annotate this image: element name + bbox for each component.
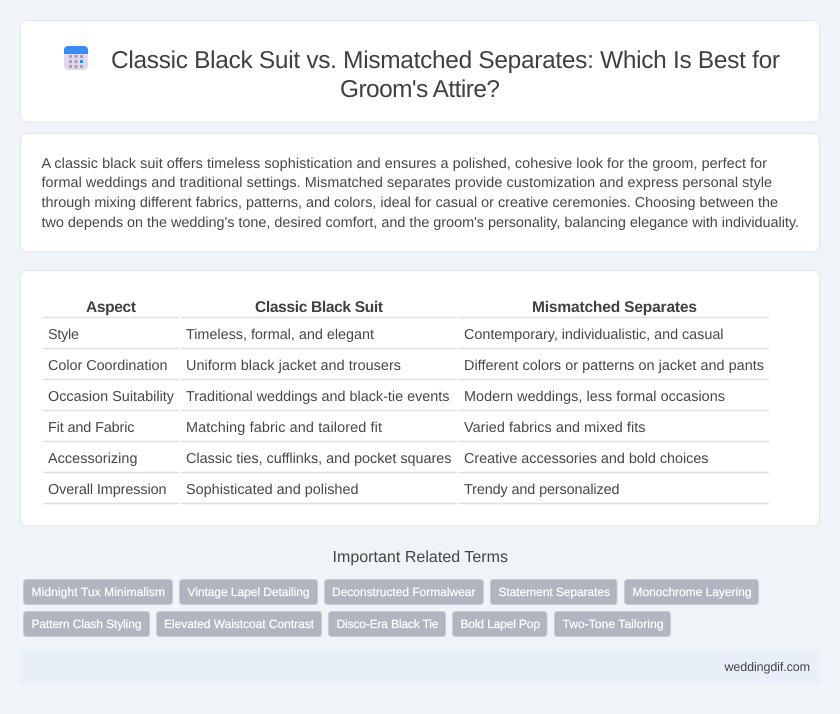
footer bar bbox=[20, 650, 820, 684]
tag: Bold Lapel Pop bbox=[452, 612, 547, 636]
tag: Statement Separates: Statement Separates bbox=[498, 585, 610, 599]
text block: introduction paragraph: A classic black suit offers timeless sophistication and ensures a polished, cohesive look for the groom, perfect for bbox=[42, 156, 767, 172]
tag list: related terms bbox=[24, 580, 758, 636]
tag: Deconstructed Formalwear: Deconstructed Formalwear bbox=[332, 585, 476, 599]
table row: fit and fabric: Matching fabric and tailored fit bbox=[186, 420, 382, 436]
table header row: Classic Black Suit bbox=[255, 299, 383, 316]
icon: calendar bbox=[64, 46, 88, 70]
text block: introduction paragraph: through mixing different fabrics, patterns, and colors, ideal for casual or creative ceremonies. Choosing between the bbox=[42, 195, 778, 211]
table row: color coordination: Different colors or patterns on jacket and pants bbox=[464, 358, 764, 374]
title: Groom's Attire? bbox=[340, 76, 500, 103]
table row: color coordination: Color Coordination bbox=[48, 358, 168, 374]
table row: accessorizing: Accessorizing bbox=[48, 451, 138, 467]
tag: Pattern Clash Styling: Pattern Clash Styling bbox=[32, 617, 142, 631]
table row: overall impression: Sophisticated and polished bbox=[186, 482, 358, 498]
text block: introduction paragraph: two depends on the wedding's tone, desired comfort, and the groom's personality, balancing elegance with individuality. bbox=[42, 215, 799, 231]
text block: introduction paragraph: formal weddings and traditional settings. Mismatched separates provide customization and express personal style bbox=[42, 175, 772, 191]
tag: Two-Tone Tailoring: Two-Tone Tailoring bbox=[562, 617, 664, 631]
table row: occasion suitability: Traditional weddings and black-tie events bbox=[186, 389, 450, 405]
tag: Midnight Tux Minimalism: Midnight Tux Minimalism bbox=[32, 585, 165, 599]
table header row bbox=[86, 299, 697, 316]
footer source text: weddingdif.com bbox=[724, 660, 810, 674]
tag: Disco-Era Black Tie bbox=[328, 612, 446, 636]
table row: overall impression: Trendy and personalized bbox=[464, 482, 620, 498]
table row: accessorizing: Classic ties, cufflinks, and pocket squares bbox=[186, 451, 452, 467]
table row: fit and fabric: Fit and Fabric bbox=[48, 420, 134, 436]
title bbox=[111, 47, 780, 103]
table header row: Mismatched Separates bbox=[532, 299, 697, 316]
tag: Deconstructed Formalwear bbox=[324, 580, 484, 604]
table row: style: Style bbox=[48, 327, 79, 343]
table row: color coordination bbox=[48, 358, 764, 374]
panel: comparison table bbox=[20, 270, 820, 526]
tag: Pattern Clash Styling bbox=[24, 612, 150, 636]
tag: Disco-Era Black Tie: Disco-Era Black Tie bbox=[336, 617, 439, 631]
table row: fit and fabric bbox=[48, 420, 646, 436]
table row: style bbox=[48, 327, 724, 343]
tag: Statement Separates bbox=[490, 580, 617, 604]
table row: accessorizing: Creative accessories and bold choices bbox=[464, 451, 708, 467]
tag: Monochrome Layering bbox=[624, 580, 758, 604]
title: Classic Black Suit vs. Mismatched Separates: Which Is Best for bbox=[111, 47, 780, 74]
table header row: Aspect bbox=[86, 299, 136, 316]
table row: occasion suitability: Modern weddings, less formal occasions bbox=[464, 389, 725, 405]
panel: introduction bbox=[20, 134, 820, 252]
text block: introduction paragraph bbox=[42, 156, 799, 231]
tag: Bold Lapel Pop: Bold Lapel Pop bbox=[460, 617, 540, 631]
tag: Monochrome Layering: Monochrome Layering bbox=[632, 585, 752, 599]
panel: title header bbox=[20, 20, 820, 122]
table row: style: Contemporary, individualistic, and casual bbox=[464, 327, 724, 343]
table row: color coordination: Uniform black jacket and trousers bbox=[186, 358, 401, 374]
tag: Vintage Lapel Detailing: Vintage Lapel Detailing bbox=[188, 585, 310, 599]
heading: important related terms: Important Related Terms bbox=[332, 549, 508, 566]
tag: Elevated Waistcoat Contrast bbox=[156, 612, 322, 636]
table row: style: Timeless, formal, and elegant bbox=[186, 327, 374, 343]
tag: Midnight Tux Minimalism bbox=[24, 580, 172, 604]
table row: overall impression: Overall Impression bbox=[48, 482, 166, 498]
tag: Vintage Lapel Detailing bbox=[180, 580, 318, 604]
table row: fit and fabric: Varied fabrics and mixed fits bbox=[464, 420, 646, 436]
table row: occasion suitability: Occasion Suitability bbox=[48, 389, 175, 405]
tag: Elevated Waistcoat Contrast: Elevated Waistcoat Contrast bbox=[164, 617, 315, 631]
tag: Two-Tone Tailoring bbox=[554, 612, 670, 636]
table row: accessorizing bbox=[48, 451, 708, 467]
table row: overall impression bbox=[48, 482, 620, 498]
table row: occasion suitability bbox=[48, 389, 725, 405]
